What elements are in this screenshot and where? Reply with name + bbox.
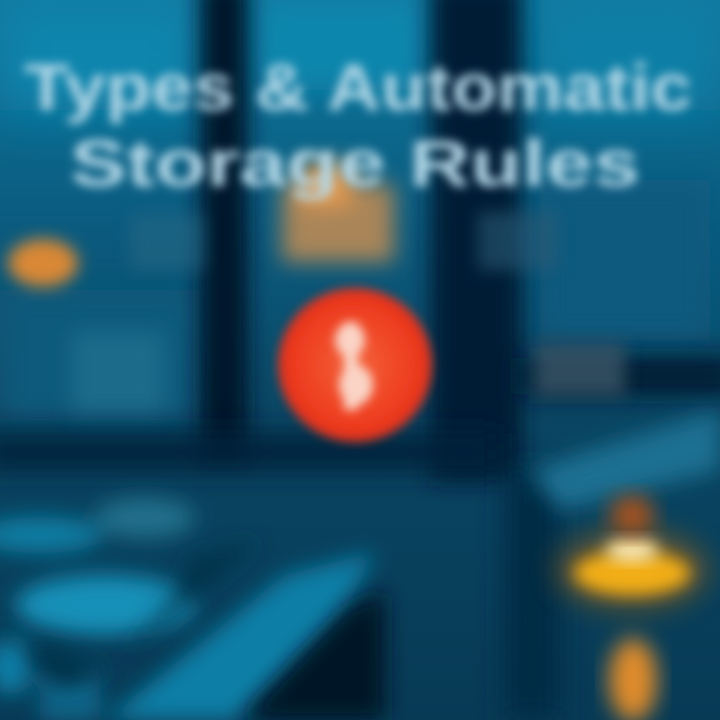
orange lamp reflection	[609, 638, 657, 720]
orange box panel	[282, 164, 394, 262]
dark lower-left stripes	[0, 540, 260, 690]
icon glyph	[335, 322, 373, 410]
faint text block: middle right	[535, 342, 625, 396]
faint text block: upper centre-left	[130, 215, 204, 270]
faint text block: middle left	[72, 332, 164, 412]
faint text block: upper right	[478, 212, 558, 270]
teal floor shapes	[0, 410, 720, 720]
orange badge	[8, 239, 78, 287]
title: Types & Automatic	[24, 50, 692, 124]
red circle icon	[278, 288, 432, 442]
yellow lamp glow	[556, 495, 708, 610]
dark horizontal band	[0, 358, 720, 720]
title	[24, 50, 692, 200]
dark floor wedge	[240, 590, 385, 720]
title: Storage Rules	[70, 126, 640, 200]
dark vertical pillars	[200, 0, 522, 480]
